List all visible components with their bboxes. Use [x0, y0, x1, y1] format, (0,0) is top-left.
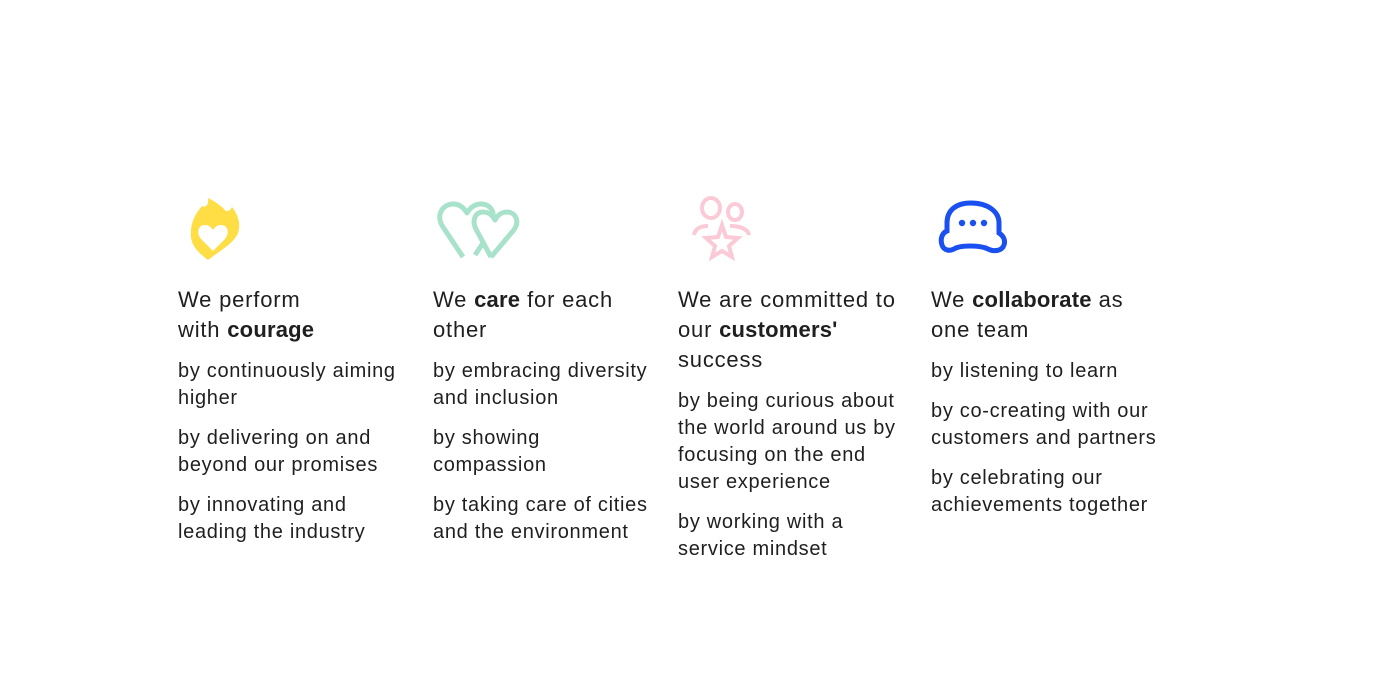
heading: [678, 287, 896, 372]
text block: beyond our promises: [178, 454, 378, 476]
icon: flame heart: [190, 198, 240, 260]
text block: higher: [178, 387, 238, 409]
heading: [931, 287, 1123, 342]
heading: [433, 287, 613, 342]
text block: by co-creating with our: [931, 400, 1148, 422]
heading: We are committed to: [678, 287, 896, 312]
text block: achievements together: [931, 494, 1148, 516]
text block: by listening to learn: [931, 360, 1118, 382]
text block: by continuously aiming: [178, 360, 396, 382]
text block: focusing on the end: [678, 444, 866, 466]
panel: care: [433, 202, 648, 543]
panel: collaborate: [931, 200, 1156, 516]
heading: We collaborate as: [931, 287, 1123, 312]
text block: by taking care of cities: [433, 494, 648, 516]
text block: by working with a: [678, 511, 843, 533]
heading: our customers': [678, 317, 838, 342]
heading: one team: [931, 317, 1029, 342]
text block: customers and partners: [931, 427, 1156, 449]
text block: by embracing diversity: [433, 360, 647, 382]
heading: other: [433, 317, 487, 342]
text block: by delivering on and: [178, 427, 371, 449]
text block: service mindset: [678, 538, 827, 560]
text block: and inclusion: [433, 387, 559, 409]
text block: and the environment: [433, 521, 629, 543]
heading: We care for each: [433, 287, 613, 312]
text block: user experience: [678, 471, 831, 493]
icon: chat bubble: [938, 200, 1008, 254]
icon: people star: [692, 196, 751, 261]
icon: two hearts: [437, 202, 520, 258]
text block: by innovating and: [178, 494, 347, 516]
panel: customers: [678, 196, 896, 560]
heading: We perform: [178, 287, 301, 312]
text block: by showing: [433, 427, 540, 449]
text block: by being curious about: [678, 390, 895, 412]
text block: the world around us by: [678, 417, 896, 439]
text block: [678, 390, 896, 560]
text block: leading the industry: [178, 521, 365, 543]
text block: by celebrating our: [931, 467, 1103, 489]
text block: [178, 360, 396, 543]
text block: [931, 360, 1156, 516]
text block: compassion: [433, 454, 547, 476]
text block: [433, 360, 648, 543]
panel: courage: [178, 198, 396, 543]
heading: [178, 287, 314, 342]
heading: with courage: [178, 317, 314, 342]
heading: success: [678, 347, 763, 372]
